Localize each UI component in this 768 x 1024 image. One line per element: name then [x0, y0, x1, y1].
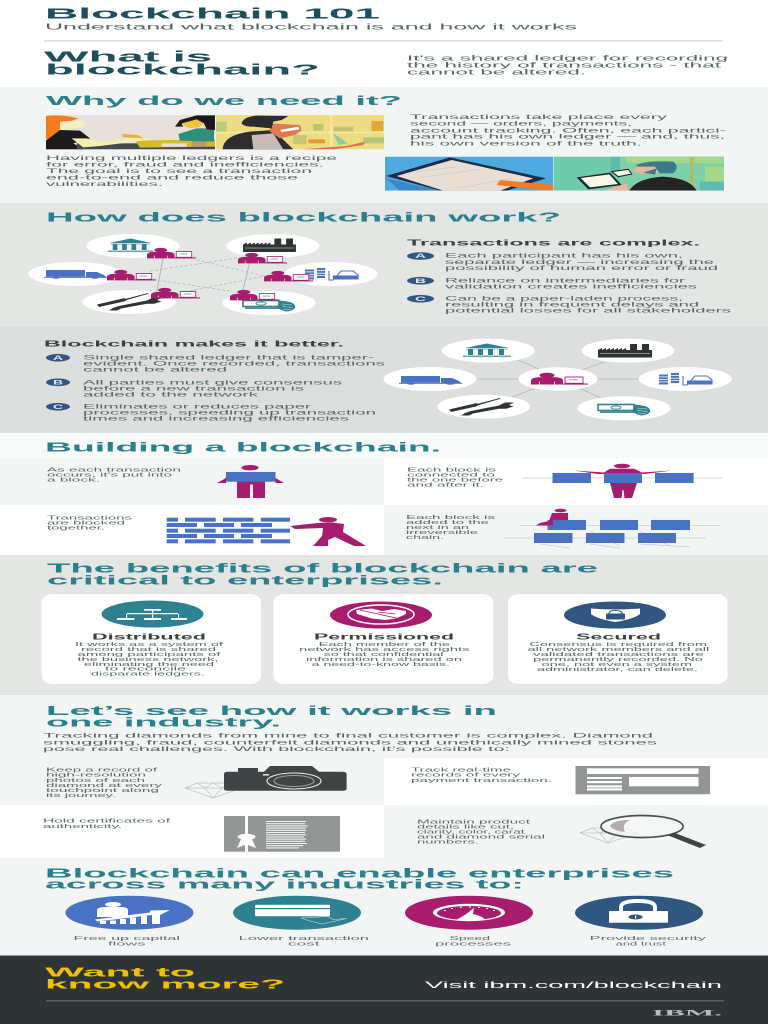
cell: photos — [46, 766, 347, 799]
card: secured: validated transactions are — [533, 652, 704, 658]
step 2: and after it. — [407, 482, 484, 488]
item: speed — [405, 896, 533, 947]
icon: network — [102, 600, 204, 628]
card: permissioned: Permissioned — [314, 632, 454, 641]
step 4: irreversible — [406, 530, 478, 536]
item: capital flows — [65, 896, 193, 947]
text: transactions: Transactions take place every — [410, 114, 669, 121]
subheading: Transactions are complex. — [407, 239, 700, 248]
cell: photos: its journey. — [46, 793, 116, 799]
heading: critical to enterprises. — [47, 572, 443, 587]
list: benefits: C — [53, 405, 65, 411]
step 1: occurs, it's put into — [47, 472, 172, 478]
list: complex transactions: resulting in frequent delays and — [445, 302, 700, 309]
list: benefits: Eliminates or reduces paper — [83, 404, 313, 411]
card: distributed: Distributed — [92, 632, 206, 641]
panel: benefits — [0, 555, 768, 695]
card: secured: permanently recorded. No — [533, 657, 703, 663]
item: transaction cost: Lower transaction — [239, 936, 369, 942]
definition text — [407, 55, 728, 77]
list: complex transactions: Can be a paper-laden process, — [445, 295, 683, 302]
list: benefits — [46, 354, 387, 422]
text: multiple ledgers: The goal is to see a transaction — [46, 168, 313, 175]
item: speed: Speed — [450, 936, 490, 942]
step 4: next in an — [406, 525, 469, 531]
title: Blockchain 101 — [45, 6, 380, 22]
item: speed: processes — [435, 941, 511, 947]
heading: blockchain? — [45, 63, 320, 79]
list: complex transactions: potential losses for all stakeholders — [445, 307, 733, 314]
definition text: cannot be altered. — [407, 70, 586, 77]
intro text: Tracking diamonds from mine to final customer is complex. Diamond — [43, 733, 654, 740]
heading — [45, 865, 674, 891]
panel: one industry — [0, 695, 768, 858]
cell: photos: photos of each — [46, 778, 145, 784]
card: distributed: It works as a system of — [75, 642, 225, 648]
heading: Building a blockchain. — [45, 440, 441, 455]
step 4: chain. — [406, 535, 444, 541]
network diagram: shared ledger — [384, 339, 732, 420]
list: complex transactions — [407, 252, 733, 314]
card: permissioned: Each member of the — [319, 642, 450, 648]
illustration: tablet and man with devices — [385, 157, 724, 191]
cell: photos: Keep a record of — [46, 768, 159, 774]
call to action: Want to — [45, 966, 196, 980]
cell: payments: Track real-time — [411, 768, 511, 774]
list: benefits: Single shared ledger that is tamper- — [83, 354, 374, 361]
step 1 — [47, 465, 284, 498]
logo: IBM: IBM. — [652, 1009, 722, 1018]
list: benefits: A — [53, 356, 65, 362]
header — [44, 6, 723, 42]
heading: Let’s see how it works in — [46, 703, 497, 718]
text: multiple ledgers: for error, fraud and inefficiencies. — [46, 162, 325, 168]
heading — [44, 50, 320, 79]
text: multiple ledgers — [46, 155, 338, 188]
list: benefits: added to the network — [83, 391, 260, 398]
step 2 — [407, 464, 722, 498]
icon: certificate — [224, 816, 340, 852]
list: benefits: evident. Once recorded, transactions — [83, 361, 387, 368]
intro text: smuggling, fraud, counterfeit diamonds and unethically mined stones — [43, 739, 659, 746]
step 3: Transactions — [47, 516, 133, 522]
list: complex transactions: Reliance on intermediaries for — [445, 277, 687, 284]
cell: product details: clarity, color, carat — [417, 830, 526, 836]
call to action: know more? — [45, 976, 285, 991]
item: capital flows: Free up capital — [74, 936, 180, 942]
card: distributed — [42, 594, 261, 684]
card: distributed: the business network, — [78, 657, 218, 663]
heading: The benefits of blockchain are — [47, 561, 598, 576]
list: complex transactions: Each participant has his own, — [445, 253, 684, 260]
cell: payments: payment transaction. — [411, 778, 552, 784]
card: distributed: among participants of — [78, 652, 222, 658]
panel: why do we need it — [0, 87, 768, 203]
heading: Blockchain can enable enterprises — [45, 865, 674, 880]
cell: product details — [417, 816, 706, 848]
heading: Why do we need it? — [46, 93, 402, 108]
step 4: added to the — [406, 520, 489, 526]
heading: one industry. — [46, 714, 281, 729]
cell: certificates: authenticity. — [43, 824, 122, 830]
cell: photos: touchpoint along — [46, 788, 159, 794]
list: benefits: processes, speeding up transaction — [83, 410, 377, 417]
item: security: and trust — [616, 941, 667, 947]
list: benefits: before a new transaction is — [83, 385, 306, 392]
item: security — [575, 896, 706, 947]
card: distributed: to reconcile — [105, 667, 186, 673]
list: complex transactions: separate ledger — increasing the — [445, 259, 715, 266]
card: secured: administrator, can delete. — [537, 667, 698, 673]
card: secured — [508, 594, 728, 684]
step 2: the one before — [407, 477, 503, 483]
heading — [46, 703, 497, 729]
step 3 — [47, 516, 366, 546]
card: secured: one, not even a system — [542, 662, 692, 668]
card: distributed: disparate ledgers. — [91, 672, 205, 678]
cell: product details: Maintain product — [417, 819, 532, 825]
cell: payments: records of every — [411, 773, 521, 779]
icon: diamond — [185, 783, 242, 798]
cell: product details: details like cut, — [417, 824, 514, 830]
panel: blockchain makes it better — [0, 327, 768, 433]
item: transaction cost — [233, 896, 369, 947]
list: benefits: cannot be altered — [83, 367, 228, 374]
item: transaction cost: cost — [288, 941, 321, 947]
item: capital flows: flows — [108, 941, 146, 947]
panel: how does blockchain work — [0, 203, 768, 327]
list: complex transactions: possibility of human error or fraud — [445, 265, 719, 272]
heading: What is — [44, 50, 212, 66]
step 3: are blocked — [47, 521, 125, 527]
call to action — [45, 966, 285, 991]
text: transactions: his own version of the truth. — [410, 140, 643, 147]
list: benefits: B — [53, 380, 65, 386]
card: permissioned: a need-to-know basis. — [312, 662, 450, 668]
card: permissioned: network has access rights — [299, 647, 471, 653]
definition text: the history of transactions - that — [407, 62, 721, 70]
text: transactions: account tracking. Often, each partici- — [410, 127, 726, 134]
step 1: As each transaction — [47, 467, 181, 473]
step 2: connected to — [407, 472, 495, 478]
intro text: pose real challenges. With blockchain, it’s possible to: — [43, 746, 511, 753]
panel: what is blockchain — [44, 50, 728, 79]
list: benefits: times and increasing efficiencies — [83, 415, 351, 422]
text: transactions: pant has his own ledger — and, thus, — [410, 134, 726, 141]
panel: footer — [0, 956, 768, 1024]
step 4: Each block is — [406, 515, 496, 521]
icon: diamond — [580, 828, 637, 843]
list: complex transactions: A — [415, 254, 428, 260]
card: permissioned — [274, 594, 494, 684]
text: multiple ledgers: Having multiple ledgers is a recipe — [46, 155, 338, 162]
step 1: a block. — [47, 477, 100, 483]
icon: record form — [576, 766, 710, 794]
cell: product details: numbers. — [417, 840, 479, 846]
card: secured: Consensus is required from — [529, 642, 707, 648]
text: multiple ledgers: vulnerabilities. — [46, 181, 164, 188]
list: complex transactions: C — [415, 297, 428, 303]
card: secured: Secured — [576, 632, 661, 641]
network diagram: separate ledgers — [28, 234, 378, 315]
icon: magnifier — [601, 816, 706, 848]
card: secured: all network members and all — [528, 647, 709, 653]
panel: across many industries — [0, 858, 768, 955]
cell: certificates: Hold certificates of — [43, 819, 172, 825]
subheading: Blockchain makes it better. — [44, 340, 344, 349]
cell: photos: diamond at every — [46, 783, 163, 789]
cell: photos: high-resolution — [46, 773, 146, 779]
text: transactions: second — orders, payments, — [410, 121, 632, 128]
icon: camera — [224, 766, 347, 791]
step 2: Each block is — [407, 467, 497, 473]
link text: Visit ibm.com/blockchain — [425, 980, 722, 990]
list: complex transactions: validation creates inefficiencies — [445, 283, 699, 290]
icon: shield — [564, 602, 666, 628]
subtitle: Understand what blockchain is and how it works — [45, 22, 577, 32]
cell: certificates — [43, 816, 340, 852]
illustration: office meeting and phone call — [46, 115, 384, 149]
heading — [47, 561, 598, 587]
text: multiple ledgers: end-to-end and reduce those — [46, 174, 299, 182]
card: distributed: eliminating the need — [84, 662, 214, 668]
card: permissioned: so that confidential — [324, 652, 444, 658]
heading: across many industries to: — [45, 876, 524, 891]
list: benefits: All parties must give consensus — [83, 379, 344, 386]
item: security: Provide security — [590, 936, 706, 942]
list: complex transactions: B — [415, 279, 428, 285]
definition text: It's a shared ledger for recording — [407, 55, 728, 62]
icon: handshake — [330, 602, 432, 628]
card: permissioned: information is shared on — [306, 657, 462, 663]
step 3: together. — [47, 526, 105, 532]
step 4 — [406, 509, 720, 548]
text: transactions — [410, 114, 726, 147]
panel: building a blockchain — [0, 433, 768, 555]
heading: How does blockchain work? — [46, 210, 561, 225]
card: distributed: record that is shared — [81, 647, 216, 653]
intro text — [43, 733, 659, 753]
cell: payments — [411, 766, 710, 794]
cell: product details: and diamond serial — [417, 835, 545, 841]
